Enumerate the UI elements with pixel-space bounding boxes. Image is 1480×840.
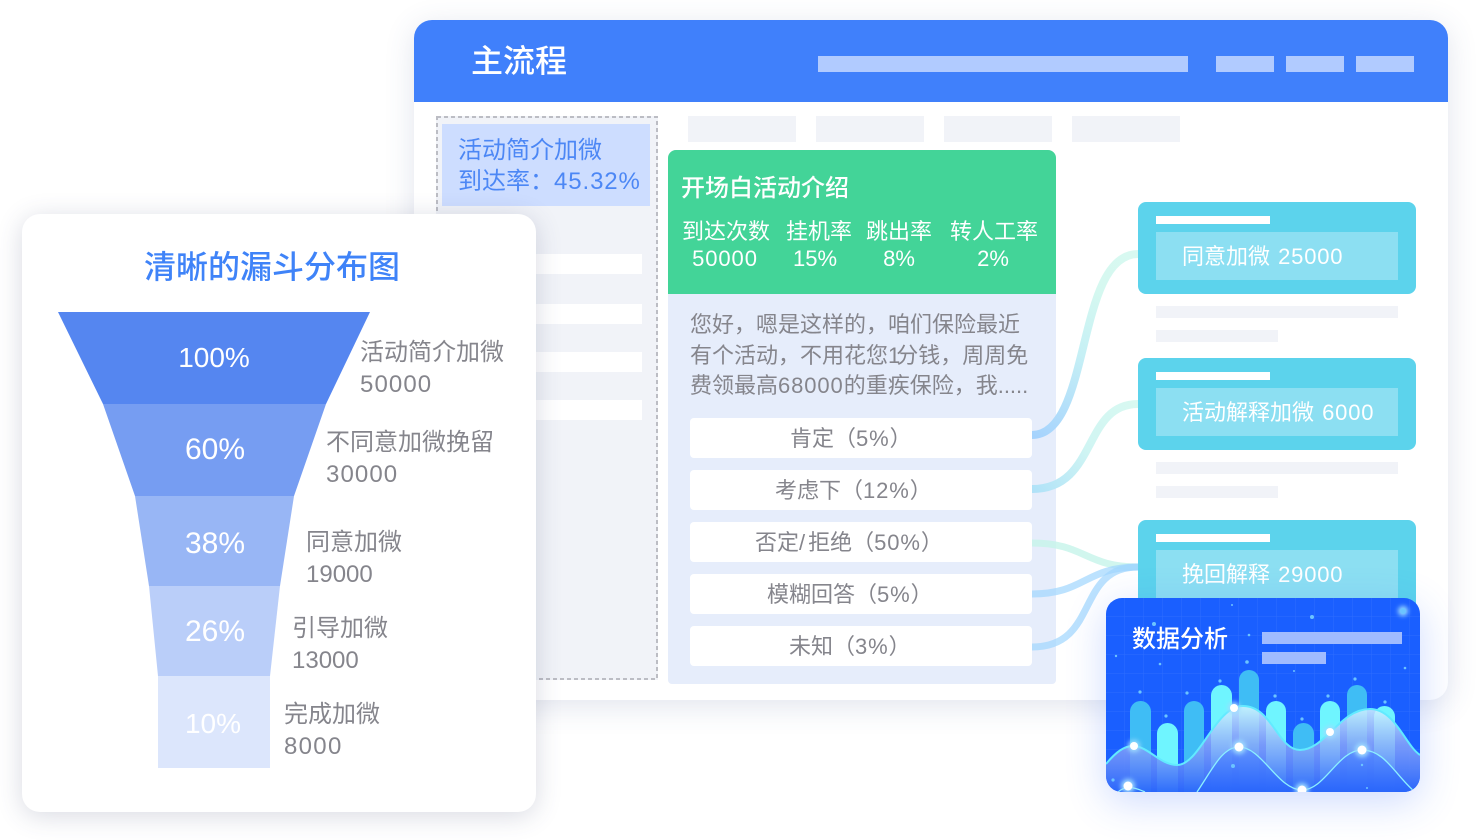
panel: data analysis card	[1106, 598, 1420, 792]
option: unknown: 未知（3%）	[789, 634, 911, 659]
label: guide: 引导加微	[292, 615, 388, 642]
window header	[414, 20, 1448, 102]
option: unknown	[690, 626, 1032, 666]
label: complete: 8000	[284, 733, 343, 760]
option: consider	[690, 470, 1032, 510]
label: activity intro: 50000	[360, 371, 432, 398]
placeholder lines 1	[1156, 306, 1398, 342]
segment 60%	[103, 404, 326, 496]
metric: transfer rate	[950, 219, 1038, 271]
panel: dashed node list	[436, 116, 658, 680]
result box: recover explain: 挽回解释 29000	[1182, 562, 1343, 587]
percent 60%: 60%	[185, 433, 245, 466]
script text	[690, 312, 1028, 398]
script text: 费领最高68000的重疾保险，我.....	[690, 373, 1028, 398]
result box: agree add	[1138, 202, 1416, 294]
metric: transfer rate: 转人工率	[950, 219, 1038, 244]
option: consider: 考虑下（12%）	[775, 478, 932, 503]
placeholder lines 2	[1156, 462, 1398, 498]
metric: reach count: 50000	[692, 246, 758, 271]
label: complete: 完成加微	[284, 701, 380, 728]
label: guide: 13000	[292, 647, 359, 674]
node: activity intro reach rate	[442, 124, 650, 206]
segment 26%	[149, 586, 280, 676]
label: agree: 同意加微	[306, 529, 402, 556]
header placeholder bars	[818, 56, 1414, 72]
placeholder rows	[536, 254, 642, 420]
percent 10%: 10%	[185, 708, 241, 739]
metric: hang-up rate	[786, 219, 852, 271]
script text: 您好，嗯是这样的，咱们保险最近	[690, 312, 1020, 337]
label: agree: 19000	[306, 561, 373, 588]
option: refuse: 否定/拒绝（50%）	[755, 530, 943, 555]
node: activity intro reach rate: 活动简介加微	[458, 137, 602, 164]
segment 10%	[158, 676, 270, 768]
connectors	[1032, 250, 1138, 650]
metric: bounce rate: 8%	[883, 246, 915, 271]
node: activity intro reach rate: 到达率：45.32%	[458, 168, 641, 195]
option: affirmative	[690, 418, 1032, 458]
option: vague	[690, 574, 1032, 614]
chart: bars and waves	[1106, 598, 1420, 792]
metric: hang-up rate: 15%	[793, 246, 837, 271]
result box: explain add: 活动解释加微 6000	[1182, 400, 1374, 425]
chart: funnel	[58, 312, 370, 768]
segment 100%	[58, 312, 370, 404]
panel: main flow window	[414, 20, 1448, 700]
heading: main flow: 主流程	[471, 43, 567, 79]
label: retain: 不同意加微挽留	[326, 429, 494, 456]
tab placeholders	[688, 116, 1180, 142]
option: vague: 模糊回答（5%）	[767, 582, 933, 607]
percent 26%: 26%	[185, 615, 245, 648]
analysis heading: 数据分析	[1132, 626, 1228, 653]
segment 38%	[135, 496, 294, 586]
metric: bounce rate: 跳出率	[866, 219, 932, 244]
percent 38%: 38%	[185, 527, 245, 560]
result box: explain add	[1138, 358, 1416, 450]
option: affirmative: 肯定（5%）	[790, 426, 912, 451]
label: activity intro: 活动简介加微	[360, 339, 504, 366]
panel: opening node	[668, 150, 1056, 684]
label: complete	[284, 701, 380, 760]
metric: bounce rate	[866, 219, 932, 271]
analysis placeholder bars	[1262, 632, 1402, 664]
panel: funnel card	[22, 214, 536, 812]
metric: hang-up rate: 挂机率	[786, 219, 852, 244]
metric: transfer rate: 2%	[977, 246, 1009, 271]
label: guide	[292, 615, 388, 674]
option: refuse	[690, 522, 1032, 562]
label: retain	[326, 429, 494, 488]
node title: 开场白活动介绍	[681, 175, 849, 202]
label: agree	[306, 529, 402, 588]
metric: reach count	[682, 219, 770, 271]
funnel heading: 清晰的漏斗分布图	[144, 249, 400, 285]
metric: reach count: 到达次数	[682, 219, 770, 244]
result box: recover explain	[1138, 520, 1416, 612]
percent 100%: 100%	[178, 342, 250, 373]
result box: agree add: 同意加微 25000	[1182, 244, 1343, 269]
label: activity intro	[360, 339, 504, 398]
script text: 有个活动，不用花您1分钱，周周免	[690, 342, 1028, 368]
node header	[668, 150, 1056, 294]
label: retain: 30000	[326, 461, 398, 488]
